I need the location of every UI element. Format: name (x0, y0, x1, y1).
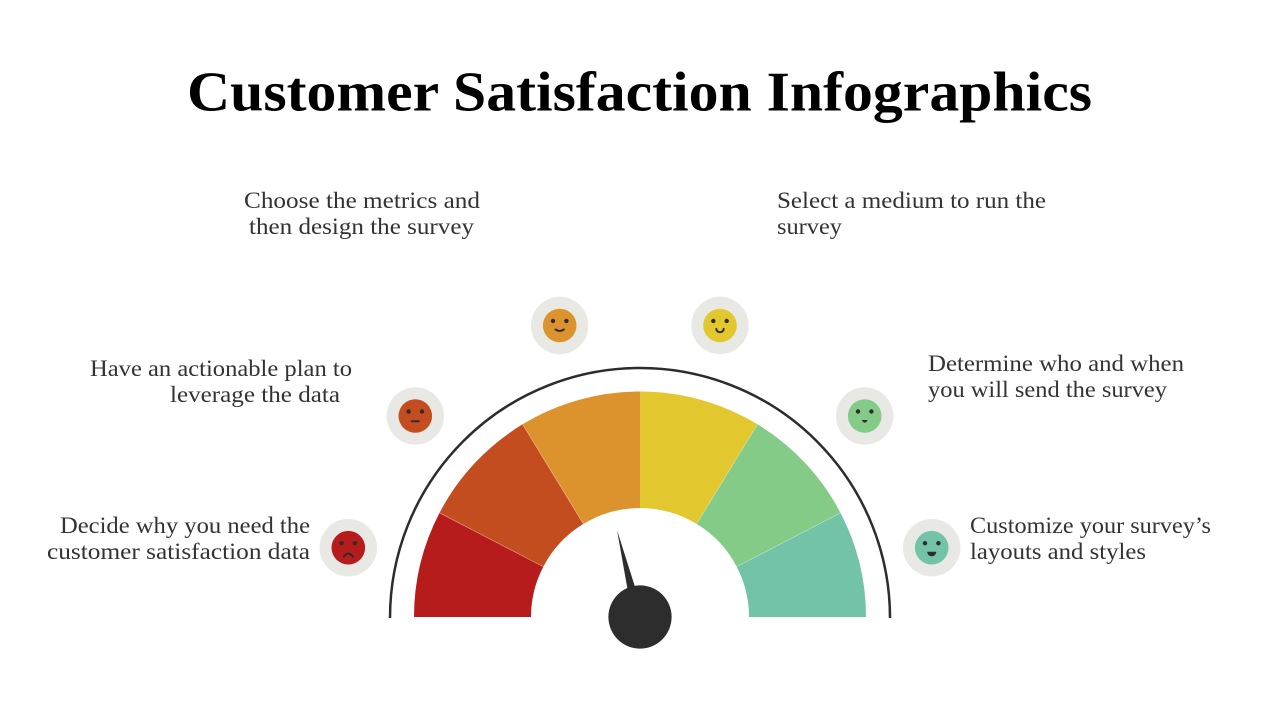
icon: smile face (691, 297, 749, 354)
gauge outer arc (390, 368, 890, 618)
icon: very unhappy face (320, 519, 377, 576)
text: decide why: customer satisfaction data (47, 539, 310, 564)
text: select a medium (777, 188, 1046, 239)
segment: dark orange (440, 424, 583, 567)
text: determine who and when (928, 351, 1185, 402)
icon: neutral face (387, 387, 444, 445)
text: actionable plan (90, 356, 352, 407)
text: customize layouts: Customize your survey’s (970, 513, 1211, 538)
text: select a medium: Select a medium to run the (777, 188, 1046, 213)
gauge needle and hub (608, 530, 672, 649)
text: actionable plan: leverage the data (170, 382, 340, 407)
segment: orange (523, 392, 640, 524)
text: select a medium: survey (777, 214, 843, 239)
text: determine who and when: Determine who and when (928, 351, 1185, 376)
text: decide why (47, 513, 310, 564)
text: customize layouts (970, 513, 1211, 564)
text: choose the metrics: Choose the metrics and (244, 188, 481, 213)
text: customize layouts: layouts and styles (970, 539, 1146, 564)
segment: teal (737, 513, 866, 617)
segment: light green (697, 424, 840, 567)
icon: happy face (836, 387, 893, 445)
segment: red (414, 513, 543, 617)
text: choose the metrics (244, 188, 481, 239)
icon: very happy face (903, 519, 960, 576)
icon: slight smile face (531, 297, 588, 354)
title: Customer Satisfaction Infographics (187, 62, 1092, 124)
segment: yellow (640, 392, 757, 524)
text: decide why: Decide why you need the (60, 513, 310, 538)
text: actionable plan: Have an actionable plan to (90, 356, 352, 381)
text: determine who and when: you will send the survey (928, 377, 1168, 402)
text: choose the metrics: then design the survey (249, 214, 475, 239)
gauge segments (414, 392, 866, 617)
